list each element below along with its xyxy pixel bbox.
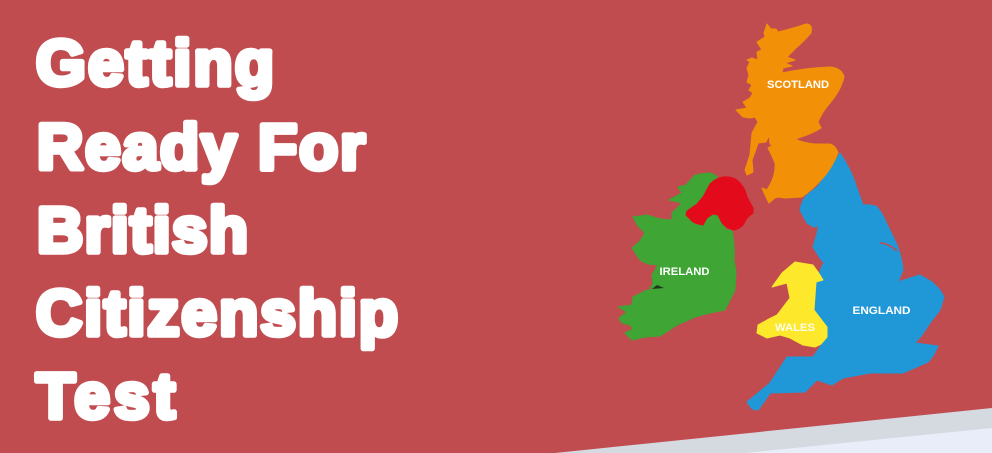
region: Ireland: IRELAND — [660, 266, 710, 278]
title — [36, 27, 398, 432]
region: Wales — [757, 262, 827, 347]
region: Ireland — [618, 173, 736, 340]
region: England — [747, 153, 944, 410]
title: Getting — [36, 27, 274, 99]
title: Citizenship — [36, 277, 398, 349]
region: England: ENGLAND — [852, 305, 911, 317]
title: Test — [36, 360, 175, 432]
estuaries — [811, 226, 897, 264]
title: Ready For — [37, 111, 365, 183]
bottom diagonal band — [555, 408, 992, 453]
map of the British Isles — [618, 24, 944, 410]
title: British — [37, 194, 248, 266]
region: Wales: WALES — [775, 322, 815, 334]
region: Scotland: SCOTLAND — [767, 79, 829, 91]
region: Scotland — [736, 24, 844, 203]
region: Northern Ireland — [686, 177, 753, 230]
river inlet — [636, 285, 664, 291]
